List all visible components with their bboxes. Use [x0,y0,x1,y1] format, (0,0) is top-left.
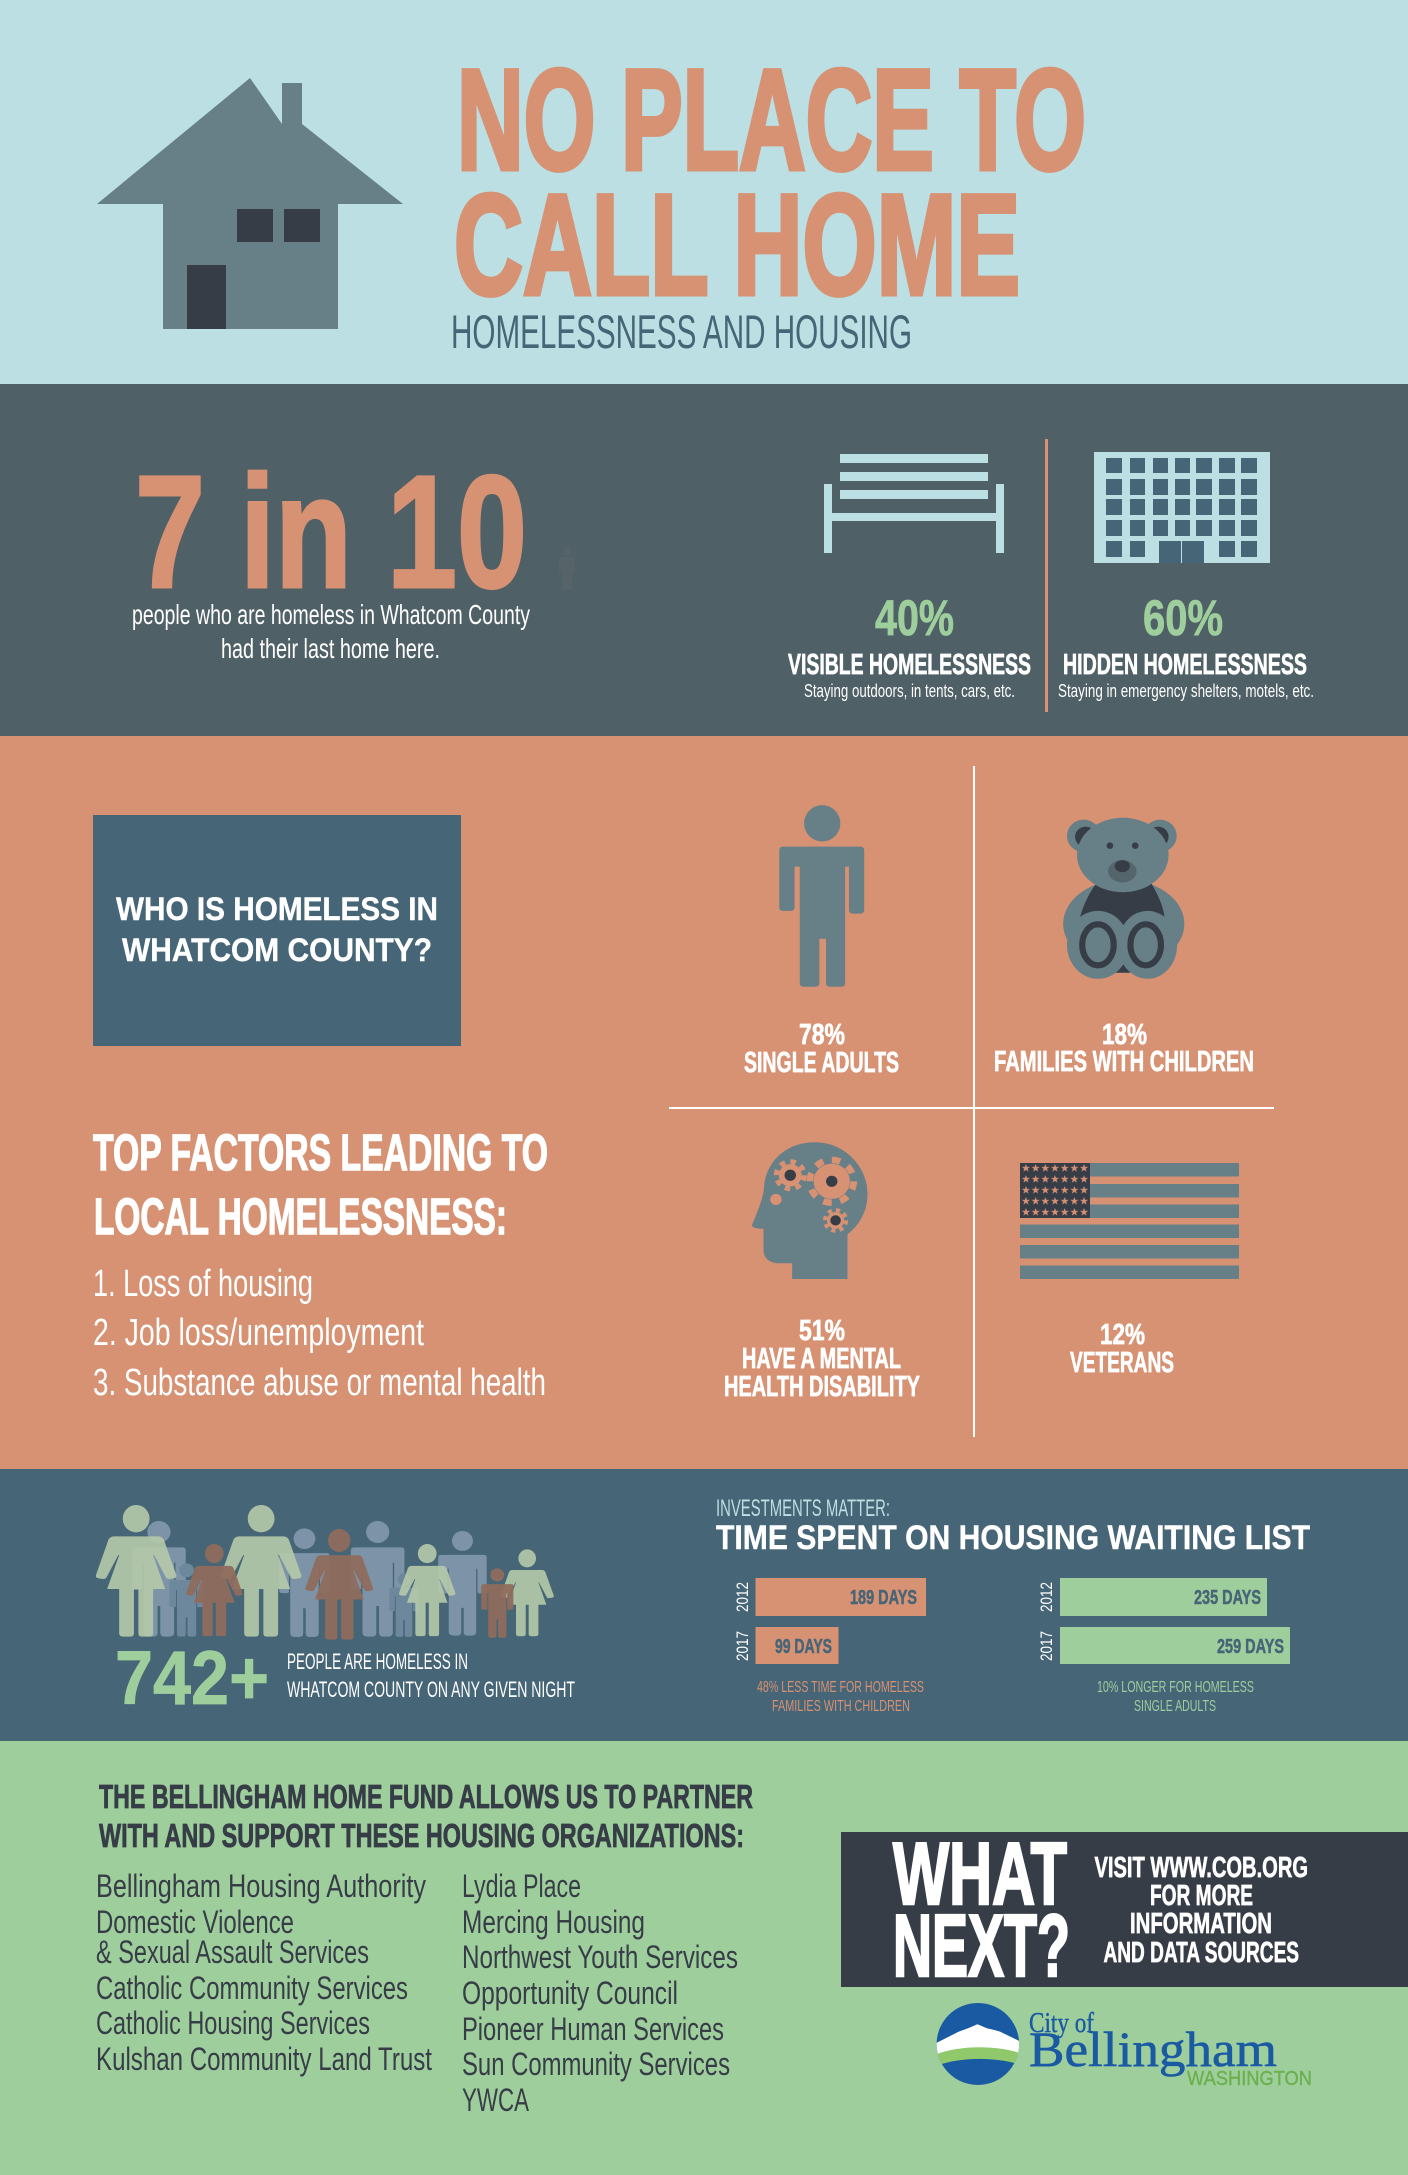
panel: seven in ten and homelessness types [0,384,1408,736]
heading: top factors [93,1124,548,1245]
list: organizations right column: Northwest Youth Services [462,1939,738,1975]
stat: 40% visible: VISIBLE HOMELESSNESS [788,649,1031,681]
bar chart: single adults: 2012 [1037,1582,1056,1612]
list: organizations right column [462,1868,738,2118]
icon: teddy bear [1063,818,1184,979]
list: organizations left column: Bellingham Housing Authority [96,1868,426,1904]
heading box: who is homeless in Whatcom County: WHATCOM COUNTY? [122,932,432,968]
bar chart: families with children: 2012 [733,1582,752,1612]
list: organizations right column: Sun Community Services [462,2046,730,2082]
caption: single adults [1097,1679,1254,1715]
callout: what next: NEXT? [893,1896,1070,1995]
bar chart: families with children: 99 DAYS [775,1636,832,1658]
title: NO PLACE TO [457,41,1086,200]
stat: mental health disability: HAVE A MENTAL [742,1343,901,1375]
list: organizations left column: Domestic Violence [96,1904,294,1940]
list: organizations left column: Kulshan Community Land Trust [96,2041,432,2077]
panel: header [0,0,1408,384]
list: organizations left column [96,1868,432,2077]
icon: bench [824,454,1004,553]
list: organizations right column: Opportunity Council [462,1975,678,2011]
logo: City of Bellingham: City of [1029,2008,1095,2039]
description: last home here: had their last home here. [221,633,440,664]
list: top factors [93,1263,546,1404]
list: organizations left column: Catholic Community Services [96,1970,408,2006]
title [454,41,1086,325]
icon: American flag [1020,1163,1239,1279]
logo: City of Bellingham: Bellingham [1029,2021,1277,2077]
callout: what next: WHAT [893,1824,1067,1923]
list: organizations right column: YWCA [462,2082,529,2118]
stat: 60% hidden [1058,590,1314,701]
caption: single adults: SINGLE ADULTS [1134,1698,1216,1715]
stat: mental health disability: 51% [799,1315,845,1347]
stat: 40% visible: Staying outdoors, in tents, cars, etc. [804,681,1015,701]
logo: City of Bellingham: WASHINGTON [1187,2068,1312,2090]
stat: 40% visible [788,590,1031,701]
stat: single adults: SINGLE ADULTS [744,1047,899,1079]
title: CALL HOME [454,166,1020,325]
callout: what next [841,1824,1408,1995]
stat: single adults: 78% [799,1019,845,1051]
big statistic: 7 in 10: 7 in 10 [135,442,527,621]
list: top factors: 1. Loss of housing [93,1263,313,1305]
description: last home here [132,599,530,664]
callout: what next: AND DATA SOURCES [1104,1937,1299,1969]
list: organizations left column: & Sexual Assault Services [96,1934,369,1970]
caption: single adults: 10% LONGER FOR HOMELESS [1097,1679,1254,1696]
icon: house [97,78,403,329]
bar chart: families with children: 189 DAYS [850,1587,917,1609]
logo: City of Bellingham [932,2000,1312,2090]
description: people homeless: WHATCOM COUNTY ON ANY GIVEN NIGHT [287,1677,575,1702]
bar chart: families with children [733,1578,926,1664]
icon: crowd of people [96,1505,554,1640]
icon: faint person [559,547,575,590]
heading: top factors: TOP FACTORS LEADING TO [93,1124,548,1181]
description: people homeless: PEOPLE ARE HOMELESS IN [287,1649,468,1674]
bar chart: single adults: 2017 [1037,1631,1056,1661]
bar chart: single adults: 235 DAYS [1194,1587,1261,1609]
description: last home here: people who are homeless in Whatcom County [132,599,530,630]
panel: investments and people count [0,1469,1408,1741]
stat: 742+: 742+ [115,1636,269,1721]
stat: veterans: VETERANS [1070,1347,1174,1379]
stat: 40% visible: 40% [875,590,954,646]
stat: mental health disability: HEALTH DISABILITY [724,1371,920,1403]
heading: investments matter: INVESTMENTS MATTER: [716,1495,890,1522]
stat: veterans [1070,1319,1174,1379]
heading: time spent: TIME SPENT ON HOUSING WAITING LIST [716,1519,1310,1557]
stat: families with children [994,1019,1254,1078]
list: top factors: 3. Substance abuse or mental health [93,1362,546,1404]
icon: single adult [779,805,864,987]
stat: 60% hidden: Staying in emergency shelters, motels, etc. [1058,681,1314,701]
heading box: who is homeless in Whatcom County [93,815,461,1046]
callout: what next: FOR MORE [1150,1880,1253,1912]
list: top factors: 2. Job loss/unemployment [93,1312,424,1354]
panel: who is homeless [0,736,1408,1469]
heading: home fund [99,1778,753,1854]
list: organizations right column: Mercing Housing [462,1904,645,1940]
list: organizations left column: Catholic Housing Services [96,2005,370,2041]
stat: veterans: 12% [1100,1319,1145,1351]
heading box: who is homeless in Whatcom County: WHO IS HOMELESS IN [116,891,438,927]
caption: families with children [757,1679,924,1715]
stat: mental health disability [724,1315,920,1403]
stat: families with children: FAMILIES WITH CHILDREN [994,1046,1254,1078]
heading: home fund: WITH AND SUPPORT THESE HOUSING ORGANIZATIONS: [99,1817,744,1854]
bar chart: families with children: 2017 [733,1631,752,1661]
stat: single adults [744,1019,899,1079]
list: organizations right column: Lydia Place [462,1868,581,1904]
bar chart: single adults [1037,1578,1290,1664]
icon: head with gears [752,1142,868,1279]
callout: what next: VISIT WWW.COB.ORG [1094,1852,1308,1884]
caption: families with children: FAMILIES WITH CHILDREN [772,1698,910,1715]
subtitle: HOMELESSNESS AND HOUSING [451,305,912,358]
callout: what next: INFORMATION [1130,1908,1272,1940]
list: organizations right column: Pioneer Human Services [462,2011,724,2047]
heading: home fund: THE BELLINGHAM HOME FUND ALLOWS US TO PARTNER [99,1778,753,1815]
heading: top factors: LOCAL HOMELESSNESS: [94,1188,507,1245]
bar chart: single adults: 259 DAYS [1217,1636,1284,1658]
stat: 60% hidden: 60% [1143,590,1223,646]
description: people homeless [287,1649,575,1702]
panel: home fund partners and next steps [0,1741,1408,2175]
icon: building [1094,452,1270,563]
caption: families with children: 48% LESS TIME FOR HOMELESS [757,1679,924,1696]
stat: families with children: 18% [1102,1019,1147,1051]
